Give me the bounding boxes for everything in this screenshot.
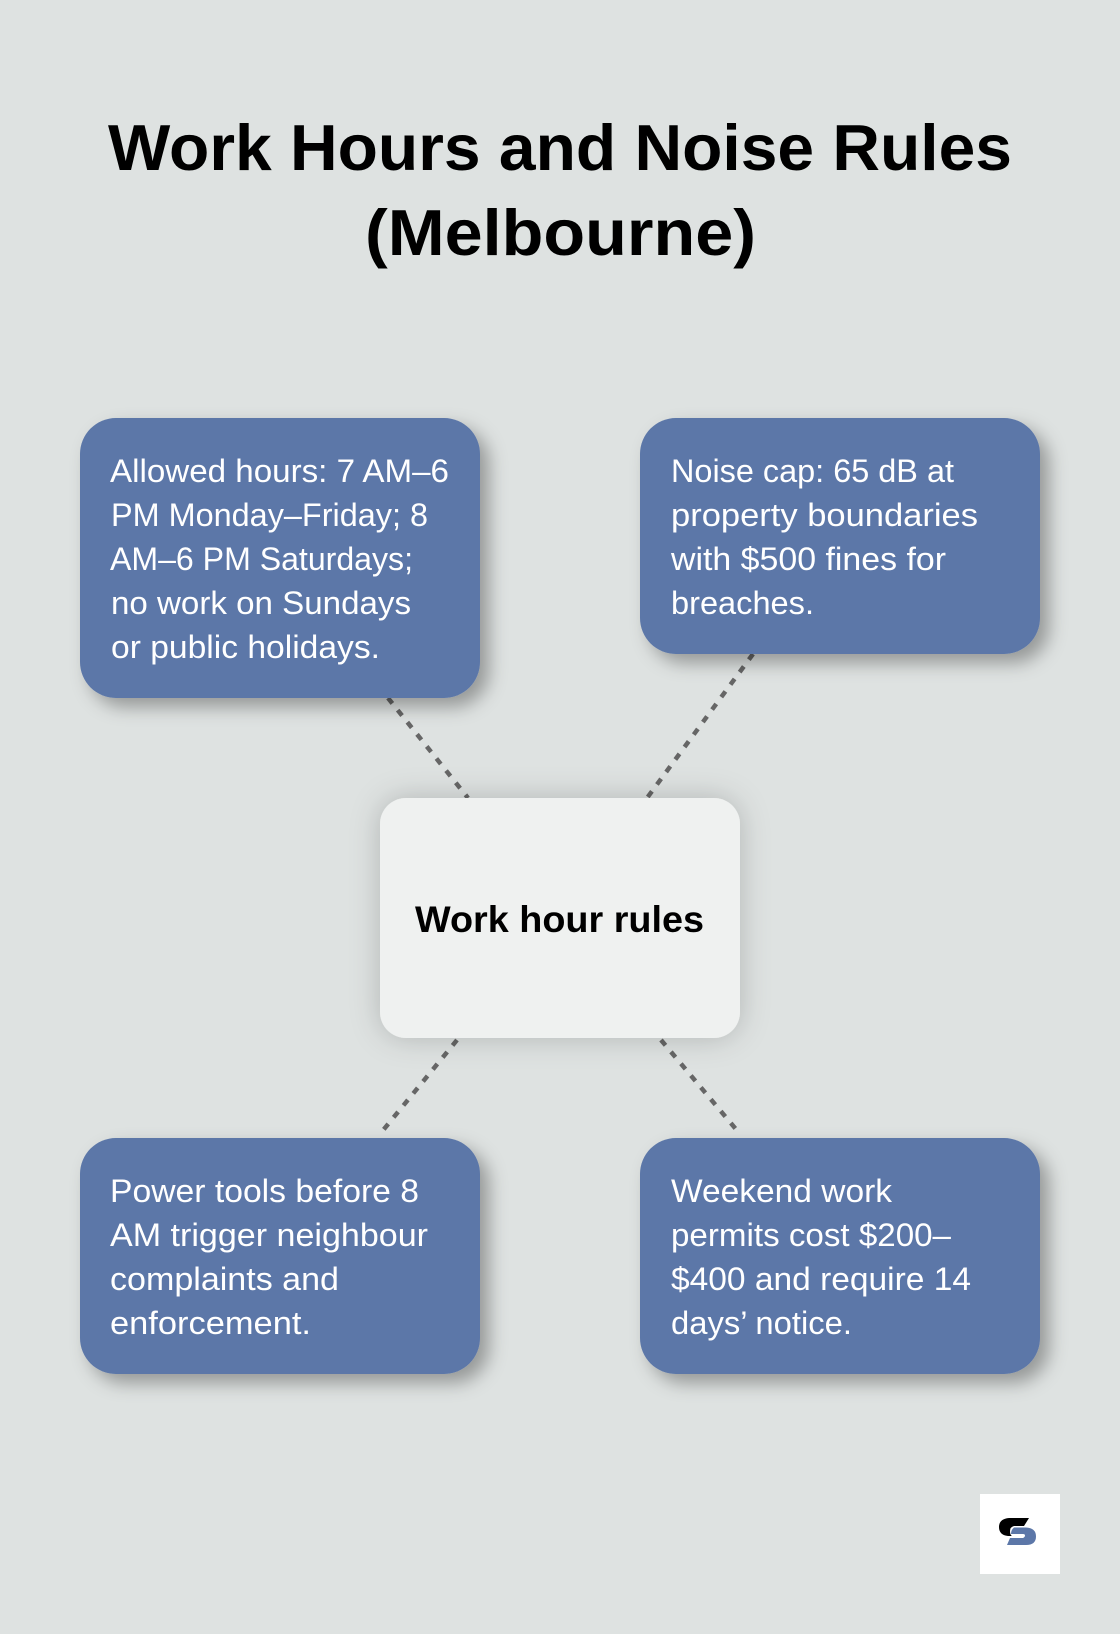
panel: noise cap: breaches. xyxy=(671,585,814,621)
panel: noise cap: Noise cap: 65 dB at xyxy=(671,453,954,489)
panel: power tools xyxy=(80,1138,480,1374)
panel: centre node xyxy=(380,798,740,1038)
panel: allowed hours: or public holidays. xyxy=(111,629,380,665)
panel: allowed hours: AM–6 PM Saturdays; xyxy=(110,541,413,577)
icon: logo xyxy=(980,1494,1060,1574)
panel: allowed hours: Allowed hours: 7 AM–6 xyxy=(110,453,449,489)
panel: weekend permits xyxy=(640,1138,1040,1374)
panel: weekend permits: permits cost $200– xyxy=(671,1217,952,1253)
panel: allowed hours: PM Monday–Friday; 8 xyxy=(111,497,428,533)
panel: noise cap: property boundaries xyxy=(671,497,978,533)
title xyxy=(108,111,1012,269)
title: (Melbourne) xyxy=(365,196,756,269)
panel: allowed hours: no work on Sundays xyxy=(111,585,411,621)
panel: noise cap: with $500 fines for xyxy=(670,541,946,577)
panel: power tools: Power tools before 8 xyxy=(110,1173,419,1209)
panel: power tools: complaints and xyxy=(110,1261,339,1297)
panel: weekend permits: days’ notice. xyxy=(671,1305,852,1341)
connectors: dashed lines from the centre to each box xyxy=(380,654,753,1134)
panel: allowed hours xyxy=(80,418,480,698)
panel: power tools: enforcement. xyxy=(110,1305,311,1341)
panel: centre node: Work hour rules xyxy=(415,899,704,940)
panel: noise cap xyxy=(640,418,1040,654)
title: Work Hours and Noise Rules xyxy=(108,111,1012,184)
panel: power tools: AM trigger neighbour xyxy=(110,1217,428,1253)
panel: weekend permits: $400 and require 14 xyxy=(671,1261,971,1297)
panel: weekend permits: Weekend work xyxy=(671,1173,893,1209)
